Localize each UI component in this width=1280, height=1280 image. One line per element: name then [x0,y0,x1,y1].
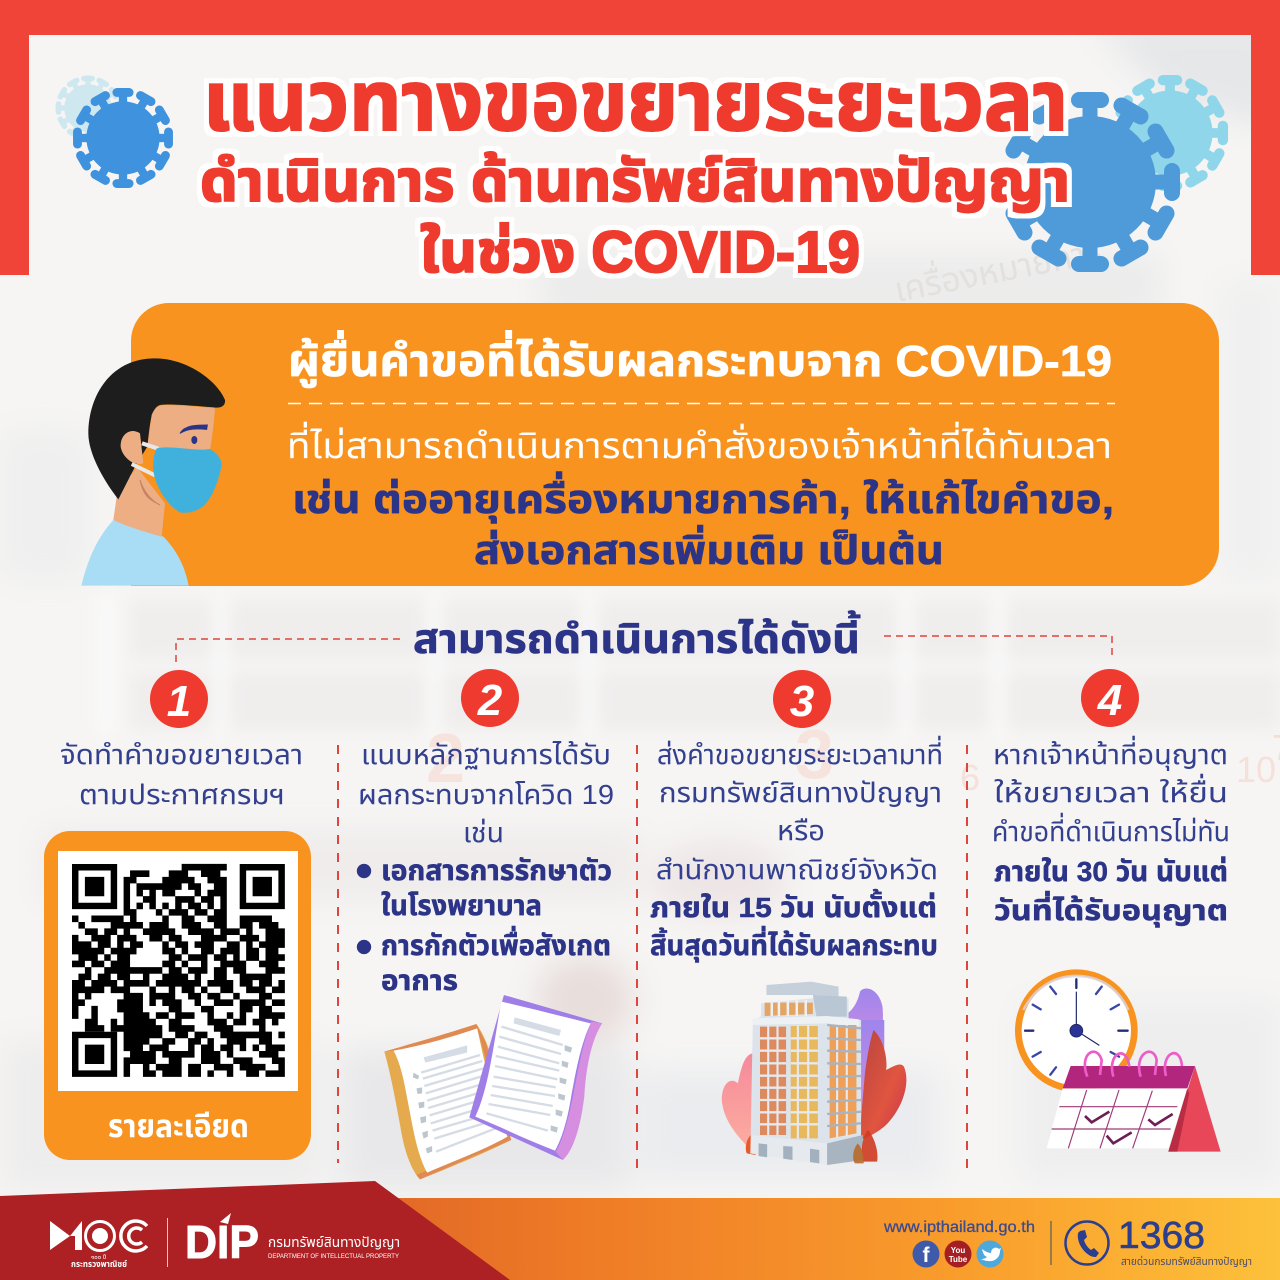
step 2 bullet list: เอกสารการรักษาตัว [381,855,612,886]
step 2 [357,669,614,1179]
step 1 [44,670,311,1160]
step 4 text [992,735,1230,847]
QR code [72,864,285,1077]
website and social: f [922,1244,930,1267]
title [200,54,1070,285]
panel examples [292,471,1114,573]
logo: MOC: กระทรวงพาณิชย์ [71,1259,127,1269]
title: ดำเนินการ ด้านทรัพย์สินทางปัญญา [200,149,1070,214]
step 4 number: 4 [1097,676,1122,725]
section heading: สามารถดำเนินการได้ดังนี้ [413,610,861,662]
footer [0,1181,1280,1280]
step 3 text: สำนักงานพาณิชย์จังหวัด [656,854,938,885]
logo: MOC: ๑๐๐ ปี [91,1254,107,1261]
step 2 number: 2 [477,676,503,725]
icon: building with flames [722,982,906,1165]
step 2 text: เช่น [463,817,504,848]
hotline 1368 [1066,1215,1252,1268]
logo: DIP: DEPARTMENT OF INTELLECTUAL PROPERTY [268,1253,400,1260]
step 3 number [773,670,831,728]
step 3 text: กรมทรัพย์สินทางปัญญา [659,777,942,808]
step 2 text [358,739,614,848]
step 3 text: ส่งคำขอขยายระยะเวลามาที่ [657,735,943,770]
logo: DIP [185,1213,400,1268]
step 1 number: 1 [167,677,191,726]
panel heading: ผู้ยื่นคำขอที่ได้รับผลกระทบจาก COVID-19 [288,330,1112,388]
step 2 text: ผลกระทบจากโควิด 19 [358,779,614,810]
step 3 deadline [650,888,938,962]
step 2 bullet list: ในโรงพยาบาล [381,890,542,921]
panel description: ที่ไม่สามารถดำเนินการตามคำสั่งของเจ้าหน้าที่ได้ทันเวลา [287,421,1112,466]
icon: clock and calendar [1018,973,1221,1152]
step 2 bullet list: การกักตัวเพื่อสังเกต [381,925,611,961]
website and social: Tube [949,1255,968,1264]
step 4 deadline [994,856,1228,927]
hotline 1368: 1368 [1118,1215,1205,1257]
step 2 text: แนบหลักฐานการได้รับ [361,739,611,770]
icon: documents [384,995,602,1179]
step 3 deadline: สิ้นสุดวันที่ได้รับผลกระทบ [650,925,938,962]
background: faded office photo: 2 [426,719,465,797]
website and social: www.ipthailand.go.th [883,1219,1035,1236]
background: faded office photo: เครื่องหมายการ [890,227,1105,310]
step 4 text: หากเจ้าหน้าที่อนุญาต [993,735,1228,771]
QR caption: รายละเอียด [108,1108,249,1144]
hotline 1368: สายด่วนกรมทรัพย์สินทางปัญญา [1121,1255,1252,1268]
logo: DIP: DIP [185,1216,259,1268]
step 3 text: หรือ [777,815,825,846]
step 4 [992,669,1230,1152]
header frame [0,0,1280,275]
panel examples: เช่น ต่ออายุเครื่องหมายการค้า, ให้แก้ไขคำขอ, [292,471,1114,524]
icon: large virus right [1008,80,1223,264]
step 4 deadline: วันที่ได้รับอนุญาต [994,890,1228,927]
step 2 bullet list: อาการ [381,965,458,996]
title: แนวทางขอขยายระยะเวลา [203,54,1068,148]
panel: affected applicants [131,303,1219,586]
icon: small virus left [58,78,169,184]
step 4 number [1081,669,1139,727]
step 1 text: ตามประกาศกรมฯ [79,779,285,810]
website and social [883,1219,1035,1268]
QR code card [44,831,311,1160]
step 3 number: 3 [790,677,814,726]
background: faded office photo: 6 [960,757,980,798]
background: faded office photo: 3 [795,715,834,793]
step 4 text: ให้ขยายเวลา ให้ยื่น [994,773,1228,808]
step 3 deadline: ภายใน 15 วัน นับตั้งแต่ [650,888,937,923]
step 2 number [461,669,519,727]
step 3 text [656,735,943,885]
step 4 text: คำขอที่ดำเนินการไม่ทัน [992,812,1230,847]
website and social: You [951,1246,965,1255]
step 2 bullet list [357,855,612,996]
icon: man wearing mask [81,358,225,586]
step 3 [650,670,943,1165]
logo: MOC [50,1221,147,1269]
step 1 text [60,739,303,810]
title: ในช่วง COVID-19 [420,220,860,285]
step 4 deadline: ภายใน 30 วัน นับแต่ [994,856,1228,887]
step 1 text: จัดทำคำขอขยายเวลา [60,739,303,770]
logo: DIP: กรมทรัพย์สินทางปัญญา [268,1234,400,1250]
step 1 number [150,670,208,728]
panel examples: ส่งเอกสารเพิ่มเติม เป็นต้น [474,524,944,573]
background: faded office photo: 10 [1236,749,1276,790]
